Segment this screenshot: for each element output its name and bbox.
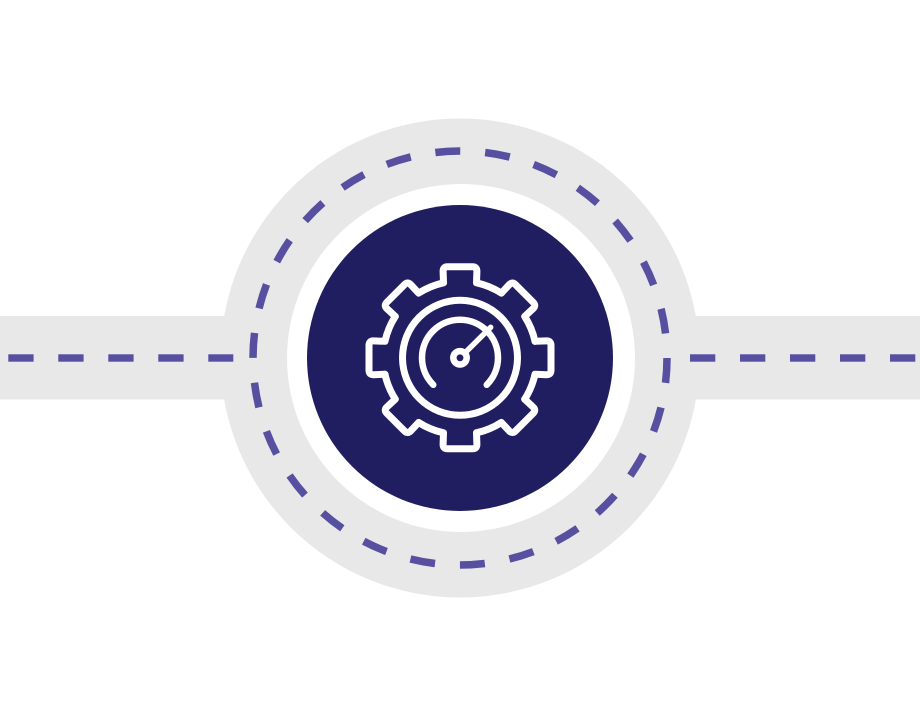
road markings: right dashed lane [690, 354, 915, 362]
speedometer outer ring [402, 300, 518, 415]
road: horizontal band left [0, 316, 260, 400]
navy central disc [307, 205, 613, 511]
icon: gear with speedometer [366, 264, 554, 451]
speedometer inner arc [422, 320, 498, 385]
road markings: left dashed lane [8, 354, 233, 362]
speedometer hub [453, 351, 467, 364]
roundabout: outer grey ring [220, 118, 700, 598]
road: horizontal band right [660, 316, 920, 400]
gear outline [366, 264, 554, 451]
speedometer needle [466, 327, 491, 352]
road markings: circular dashed lane [253, 151, 667, 565]
roundabout: inner white circle [287, 184, 635, 532]
